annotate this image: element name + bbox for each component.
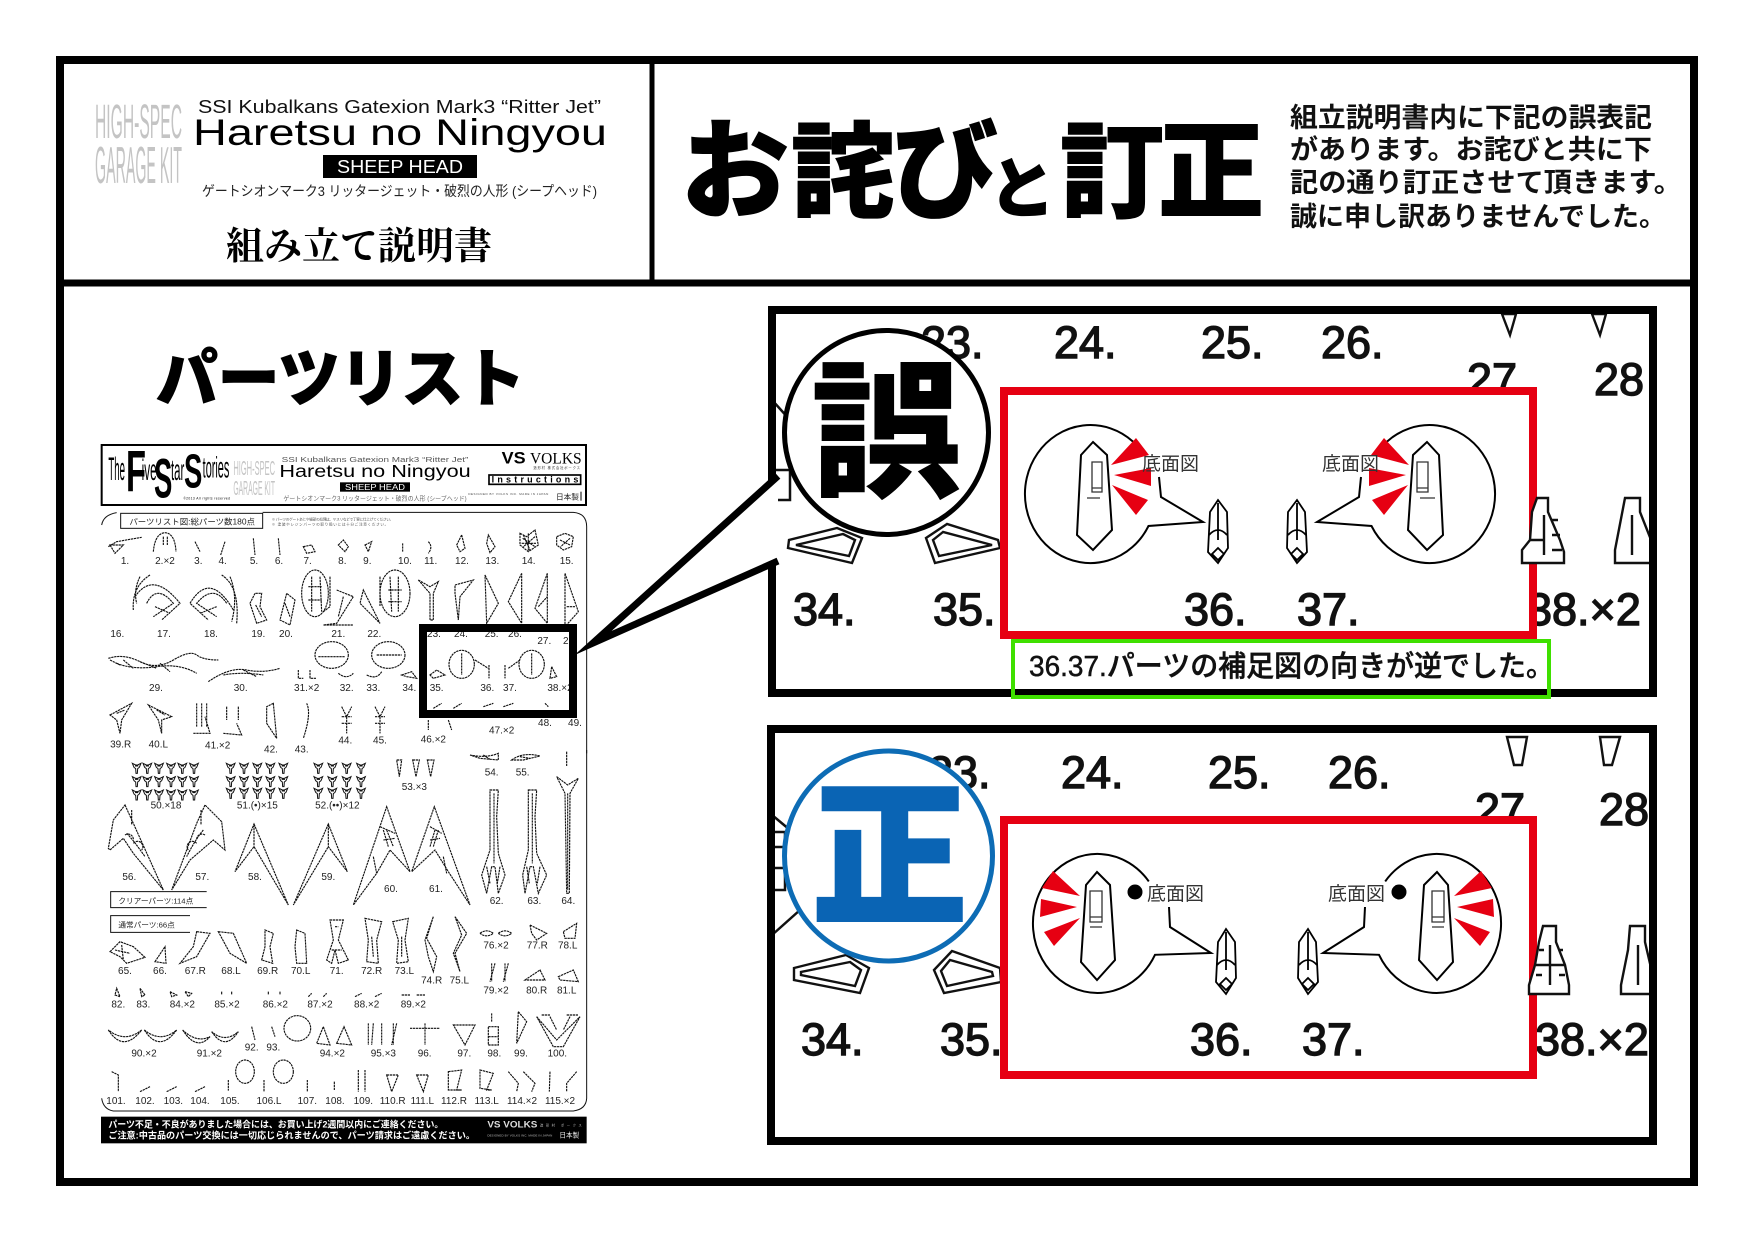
part numbers, correct sheet: 25. — [1208, 747, 1271, 798]
thumbnail header: S — [184, 445, 202, 499]
labels: parts 42 to 115: 51.(•)×15 — [237, 801, 278, 812]
labels: parts 1 to 49: 38.×2 — [547, 683, 573, 694]
labels: parts 42 to 115: 57. — [195, 872, 209, 883]
correct panel border — [771, 729, 1653, 1141]
labels: parts 1 to 49: 15. — [560, 556, 574, 567]
title: apology and correction: 正 — [1158, 114, 1264, 232]
thumbnail header: ©2013 All rights reserved — [183, 497, 230, 501]
panel: parts list thumbnail — [102, 440, 587, 753]
labels: parts 1 to 49: 8. — [338, 556, 346, 567]
labels: parts 42 to 115: 85.×2 — [214, 1000, 240, 1011]
notice text: 記の通り訂正させて頂きます。 — [1290, 168, 1682, 198]
labels: parts 42 to 115: 96. — [418, 1049, 432, 1060]
labels: parts 1 to 49: 9. — [363, 556, 371, 567]
thumbnail header: ive — [142, 454, 157, 487]
thumbnail header: tories — [203, 451, 229, 484]
labels: parts 42 to 115: 95.×3 — [371, 1049, 396, 1060]
detail view: part 36 wrong — [1025, 425, 1228, 563]
thumbnail header: GARAGE KIT — [233, 477, 275, 500]
labels: parts 1 to 49: 41.×2 — [205, 740, 231, 751]
detail view: part 37 wrong — [1287, 425, 1495, 563]
part numbers, incorrect sheet — [772, 314, 1655, 635]
labels: parts 42 to 115: 101. — [106, 1096, 126, 1107]
labels: parts 42 to 115: 64. — [561, 896, 575, 907]
thumbnail header: HIGH-SPEC — [233, 457, 275, 480]
labels: parts 1 to 49: 34. — [402, 683, 416, 694]
labels: parts 42 to 115: 81.L — [557, 985, 577, 996]
labels: parts 1 to 49: 19. — [251, 629, 265, 640]
part numbers, incorrect sheet: 25. — [1201, 317, 1264, 368]
parts count box: パーツリスト図:総パーツ数180点 — [129, 516, 255, 526]
labels: parts 1 to 49: 17. — [157, 629, 171, 640]
arrow: callout from thumbnail to panels — [593, 476, 778, 643]
detail view: part 37 correct — [1298, 854, 1501, 994]
sheep head badge: SHEEP HEAD — [337, 157, 463, 177]
title: apology and correction: と — [989, 152, 1055, 226]
part numbers, correct sheet: 35. — [940, 1014, 1003, 1065]
labels: parts 42 to 115: 97. — [457, 1049, 471, 1060]
labels: parts 42 to 115: 92. — [245, 1043, 259, 1054]
labels: parts 42 to 115: 88.×2 — [354, 1000, 380, 1011]
notice text: 組立説明書内に下記の誤表記 — [1290, 103, 1652, 133]
part numbers 36 and 37, incorrect: 36. — [1184, 584, 1247, 635]
title: apology and correction — [681, 111, 1264, 232]
labels: parts 42 to 115: 104. — [190, 1096, 210, 1107]
thumbnail header: F — [126, 440, 146, 505]
labels: parts 42 to 115: 105. — [220, 1096, 240, 1107]
labels: parts 1 to 49: 28. — [563, 636, 577, 647]
labels: parts 1 to 49: 36. — [480, 683, 494, 694]
labels: parts 1 to 49: 13. — [485, 556, 499, 567]
labels: parts 42 to 115: 84.×2 — [170, 1000, 195, 1011]
badge: incorrect — [784, 330, 988, 534]
labels: parts 42 to 115: 69.R — [257, 966, 278, 977]
heading: parts list: パーツリスト — [156, 345, 525, 415]
title: apology and correction: 訂 — [1060, 116, 1164, 232]
labels: parts 42 to 115: 108. — [325, 1096, 345, 1107]
part numbers, correct sheet: 23. — [928, 747, 991, 798]
kit name: Haretsu no Ningyou — [193, 112, 607, 153]
instructions heading: 組み立て説明書 — [226, 226, 492, 268]
labels: parts 42 to 115: 62. — [490, 896, 504, 907]
labels: parts 42 to 115: 91.×2 — [197, 1049, 222, 1060]
labels: parts 1 to 49: 44. — [338, 735, 352, 746]
parts drawings rows 1 to 4 — [108, 530, 578, 738]
labels: parts 42 to 115: 65. — [118, 966, 132, 977]
bottom view labels, incorrect — [1142, 453, 1379, 475]
labels: parts 1 to 49: 20. — [279, 629, 293, 640]
thumbnail header: DESIGNED BY VOLKS INC. MADE IN JAPAN — [468, 492, 548, 496]
labels: parts 1 to 49: 32. — [340, 683, 354, 694]
thumbnail header: 造形村 株式会社ボークス — [533, 465, 580, 470]
parts drawings rows 5 to 9 — [108, 752, 580, 1092]
notice text — [1290, 103, 1682, 232]
labels: parts 1 to 49: 12. — [455, 556, 469, 567]
labels: parts 42 to 115: 43. — [295, 745, 309, 756]
clear and normal parts boxes: 通常パーツ:66点 — [118, 919, 175, 929]
labels: parts 42 to 115: 77.R — [527, 940, 548, 951]
labels: parts 1 to 49: 37. — [503, 683, 517, 694]
thumbnail footer note: DESIGNED BY VOLKS INC. MADE IN JAPAN — [487, 1134, 552, 1138]
labels: parts 42 to 115: 55. — [516, 767, 530, 778]
labels: parts 1 to 49: 25. — [485, 629, 499, 640]
thumbnail header: Haretsu no Ningyou — [279, 461, 471, 481]
red highlight box, correct — [1004, 820, 1533, 1075]
thumbnail header — [102, 440, 586, 510]
part numbers 36 and 37, incorrect — [1184, 584, 1360, 635]
part numbers, incorrect sheet: 35. — [933, 584, 996, 635]
labels: parts 42 to 115: 98. — [487, 1049, 501, 1060]
thumbnail footer note: 造形村 ボークス — [540, 1123, 582, 1128]
title: apology and correction: お — [681, 111, 789, 232]
labels: parts 42 to 115: 110.R — [380, 1096, 406, 1107]
labels: parts 42 to 115 — [106, 745, 578, 1107]
labels: parts 1 to 49: 24. — [454, 629, 468, 640]
labels: parts 42 to 115: 66. — [153, 966, 167, 977]
part numbers, incorrect sheet: 38.×2 — [1527, 584, 1641, 635]
labels: parts 1 to 49: 47.×2 — [489, 725, 515, 736]
thumbnail header: ゲートシオンマーク3 リッタージェット・破烈の人形 (シープヘッド) — [283, 493, 467, 502]
badge: incorrect: 誤 — [811, 350, 961, 518]
thumbnail footer note: 日本製 — [559, 1130, 580, 1139]
bottom view labels, correct: 底面図 — [1147, 883, 1204, 905]
labels: parts 42 to 115: 75.L — [450, 975, 469, 986]
labels: parts 1 to 49: 5. — [250, 556, 258, 567]
thumbnail header: S — [154, 448, 172, 510]
title divider — [650, 60, 654, 283]
labels: parts 42 to 115: 68.L — [221, 966, 241, 977]
part numbers 36 and 37, incorrect: 37. — [1297, 584, 1360, 635]
labels: parts 42 to 115: 79.×2 — [483, 985, 509, 996]
labels: parts 42 to 115: 63. — [527, 896, 541, 907]
part numbers, correct sheet: 24. — [1061, 747, 1124, 798]
labels: parts 42 to 115: 112.R — [441, 1096, 467, 1107]
labels: parts 42 to 115: 103. — [164, 1096, 183, 1107]
labels: parts 1 to 49: 30. — [234, 683, 248, 694]
part numbers, correct sheet: 27 — [1475, 784, 1525, 835]
labels: parts 42 to 115: 99. — [514, 1049, 528, 1060]
labels: parts 42 to 115: 93. — [266, 1043, 280, 1054]
part 38 over red box, correct — [1529, 926, 1569, 994]
labels: parts 42 to 115: 56. — [122, 872, 136, 883]
bottom view labels, incorrect: 底面図 — [1142, 453, 1199, 475]
part numbers, incorrect sheet: 23. — [921, 317, 984, 368]
bottom view labels, incorrect: 底面図 — [1322, 453, 1379, 475]
rounded parts sheet outline — [102, 512, 587, 753]
labels: parts 42 to 115: 107. — [298, 1096, 317, 1107]
labels: parts 1 to 49: 11. — [424, 556, 437, 567]
labels: parts 1 to 49: 21. — [331, 629, 345, 640]
panel: parts list thumbnail lower half — [101, 745, 587, 1143]
labels: parts 1 to 49: 22. — [367, 629, 381, 640]
part numbers 36 and 37, correct: 36. — [1190, 1014, 1253, 1065]
clear and normal parts boxes: クリアーパーツ:114点 — [118, 896, 194, 905]
labels: parts 1 to 49: 29. — [149, 683, 163, 694]
correction note — [1013, 641, 1554, 697]
labels: parts 1 to 49: 27. — [537, 636, 551, 647]
labels: parts 42 to 115: 71. — [330, 966, 344, 977]
thumbnail footer note: VS VOLKS — [487, 1120, 537, 1130]
labels: parts 42 to 115: 70.L — [291, 966, 311, 977]
labels: parts 42 to 115: 42. — [264, 745, 278, 756]
labels: parts 42 to 115: 50.×18 — [151, 801, 182, 812]
labels: parts 42 to 115: 106.L — [256, 1096, 282, 1107]
notice text: があります。お詫びと共に下 — [1290, 134, 1652, 165]
labels: parts 42 to 115: 82. — [111, 1000, 125, 1011]
small note — [272, 517, 393, 526]
thumbnail header: tar — [171, 454, 184, 487]
labels: parts 1 to 49: 40.L — [149, 739, 168, 750]
labels: parts 42 to 115: 114.×2 — [507, 1096, 537, 1107]
part numbers, incorrect sheet: 27 — [1467, 354, 1517, 405]
labels: parts 42 to 115: 94.×2 — [320, 1049, 345, 1060]
labels: parts 42 to 115: 86.×2 — [263, 1000, 288, 1011]
labels: parts 1 to 49: 45. — [373, 735, 387, 746]
labels: parts 42 to 115: 73.L — [395, 966, 414, 977]
labels: parts 1 to 49: 18. — [204, 629, 218, 640]
bottom view labels, correct — [1147, 883, 1385, 905]
thumbnail header: The — [108, 451, 125, 487]
correction note: 36.37.パーツの補足図の向きが逆でした。 — [1029, 650, 1554, 683]
labels: parts 42 to 115: 90.×2 — [131, 1049, 157, 1060]
part numbers, correct sheet: 38.×2 — [1535, 1014, 1649, 1065]
labels: parts 1 to 49: 7. — [304, 556, 312, 567]
title: apology and correction: び — [892, 114, 998, 232]
thumbnail header: SHEEP HEAD — [345, 482, 405, 492]
panel: product title block: HIGH-SPEC — [95, 96, 182, 149]
sheep head badge — [323, 155, 477, 178]
highlight box on parts 36 and 37 — [423, 628, 573, 714]
labels: parts 1 to 49: 49. — [568, 718, 582, 729]
labels: parts 1 to 49: 6. — [275, 556, 283, 567]
labels: parts 1 to 49: 16. — [110, 629, 124, 640]
part numbers, incorrect sheet: 34. — [793, 584, 856, 635]
brand mark: high-spec garage kit — [95, 96, 182, 195]
labels: parts 1 to 49: 26. — [508, 629, 522, 640]
labels: parts 42 to 115: 83. — [136, 1000, 150, 1011]
part numbers, incorrect sheet: 26. — [1321, 317, 1384, 368]
labels: parts 42 to 115: 60. — [384, 884, 398, 895]
labels: parts 42 to 115: 102. — [135, 1096, 155, 1107]
part numbers 36 and 37, correct: 37. — [1302, 1014, 1365, 1065]
part numbers, incorrect sheet: 28 — [1594, 354, 1644, 405]
header divider — [60, 280, 1694, 286]
labels: parts 1 to 49: 35. — [430, 683, 444, 694]
japanese kit name: ゲートシオンマーク3 リッタージェット・破烈の人形 (シープヘッド) — [202, 183, 597, 199]
labels: parts 42 to 115: 58. — [248, 872, 262, 883]
panel: incorrect version — [772, 310, 1655, 697]
thumbnail header: Instructions — [492, 475, 578, 485]
labels: parts 42 to 115: 54. — [485, 767, 499, 778]
labels: parts 42 to 115: 67.R — [185, 966, 206, 977]
small crest parts 50 to 52 — [132, 763, 365, 800]
bottom view labels, correct: 底面図 — [1328, 883, 1385, 905]
notice text: 誠に申し訳ありませんでした。 — [1290, 202, 1666, 232]
thumbnail footer note: ご注意:中古品のパーツ交換には一切応じられませんので、パーツ請求はご遠慮ください。 — [108, 1130, 475, 1141]
labels: parts 1 to 49: 4. — [219, 556, 227, 567]
labels: parts 1 to 49: 10. — [398, 556, 412, 567]
labels: parts 42 to 115: 87.×2 — [307, 1000, 333, 1011]
labels: parts 42 to 115: 113.L — [475, 1096, 499, 1107]
part numbers, incorrect sheet: 24. — [1054, 317, 1117, 368]
labels: parts 1 to 49: 48. — [538, 718, 552, 729]
right edge and bottom of sheet — [102, 750, 587, 1111]
part 38 over red box, incorrect — [1522, 498, 1564, 563]
labels: parts 1 to 49: 39.R — [110, 739, 131, 750]
part numbers, correct sheet: 26. — [1328, 747, 1391, 798]
small note: ※ 塗装やレジンパーツの取り扱いには十分ご注意ください。 — [272, 521, 388, 526]
detail view: part 36 correct — [1033, 854, 1236, 994]
labels: parts 1 to 49 — [110, 556, 582, 751]
labels: parts 42 to 115: 61. — [429, 884, 443, 895]
labels: parts 1 to 49: 1. — [121, 556, 129, 567]
panel: product title block — [95, 96, 607, 268]
thumbnail header: SSI Kubalkans Gatexion Mark3 “Ritter Jet” — [282, 455, 469, 464]
labels: parts 1 to 49: 31.×2 — [294, 683, 320, 694]
kit subtitle: SSI Kubalkans Gatexion Mark3 “Ritter Jet” — [198, 97, 601, 117]
labels: parts 42 to 115: 72.R — [361, 966, 382, 977]
thumbnail footer note: パーツ不足・不良がありました場合には、お買い上げ2週間以内にご連絡ください。 — [108, 1119, 443, 1130]
panel: correct version — [771, 729, 1655, 1141]
labels: parts 42 to 115: 74.R — [421, 975, 442, 986]
labels: parts 42 to 115: 78.L — [558, 940, 578, 951]
parts count box — [121, 513, 263, 528]
labels: parts 1 to 49: 46.×2 — [421, 734, 446, 745]
panel: product title block: GARAGE KIT — [95, 137, 182, 195]
labels: parts 42 to 115: 80.R — [526, 985, 547, 996]
part numbers, correct sheet — [772, 737, 1655, 1065]
part numbers 36 and 37, correct — [1190, 1014, 1365, 1065]
labels: parts 1 to 49: 33. — [366, 683, 380, 694]
part numbers, correct sheet: 34. — [801, 1014, 864, 1065]
labels: parts 1 to 49: 23. — [427, 629, 441, 640]
labels: parts 1 to 49: 3. — [194, 556, 202, 567]
labels: parts 42 to 115: 111.L — [411, 1096, 435, 1107]
thumbnail header: VOLKS — [530, 451, 582, 468]
thumbnail header: 日本製 — [556, 491, 579, 501]
labels: parts 42 to 115: 53.×3 — [402, 782, 427, 793]
small note: ※ パーツのゲートあとや細部の処理は、ヤスリなどで丁寧に仕上げてください。 — [272, 517, 393, 522]
badge: correct: 正 — [812, 771, 967, 944]
labels: parts 42 to 115: 76.×2 — [483, 940, 509, 951]
clear and normal parts boxes — [111, 892, 207, 932]
labels: parts 1 to 49: 14. — [522, 556, 536, 567]
badge: correct — [784, 751, 992, 961]
labels: parts 42 to 115: 109. — [354, 1096, 373, 1107]
labels: parts 42 to 115: 115.×2 — [545, 1096, 575, 1107]
labels: parts 42 to 115: 52.(••)×12 — [315, 801, 360, 812]
labels: parts 42 to 115: 100. — [548, 1049, 567, 1060]
thumbnail header: VS — [502, 449, 526, 468]
labels: parts 1 to 49: 2.×2 — [155, 556, 175, 567]
thumbnail footer note — [101, 1117, 587, 1143]
title: apology and correction: 詫 — [791, 116, 895, 232]
labels: parts 42 to 115: 59. — [321, 872, 335, 883]
part numbers, correct sheet: 28 — [1599, 784, 1649, 835]
red highlight box, incorrect — [1004, 391, 1533, 635]
labels: parts 42 to 115: 89.×2 — [401, 1000, 426, 1011]
incorrect panel border — [772, 310, 1653, 693]
